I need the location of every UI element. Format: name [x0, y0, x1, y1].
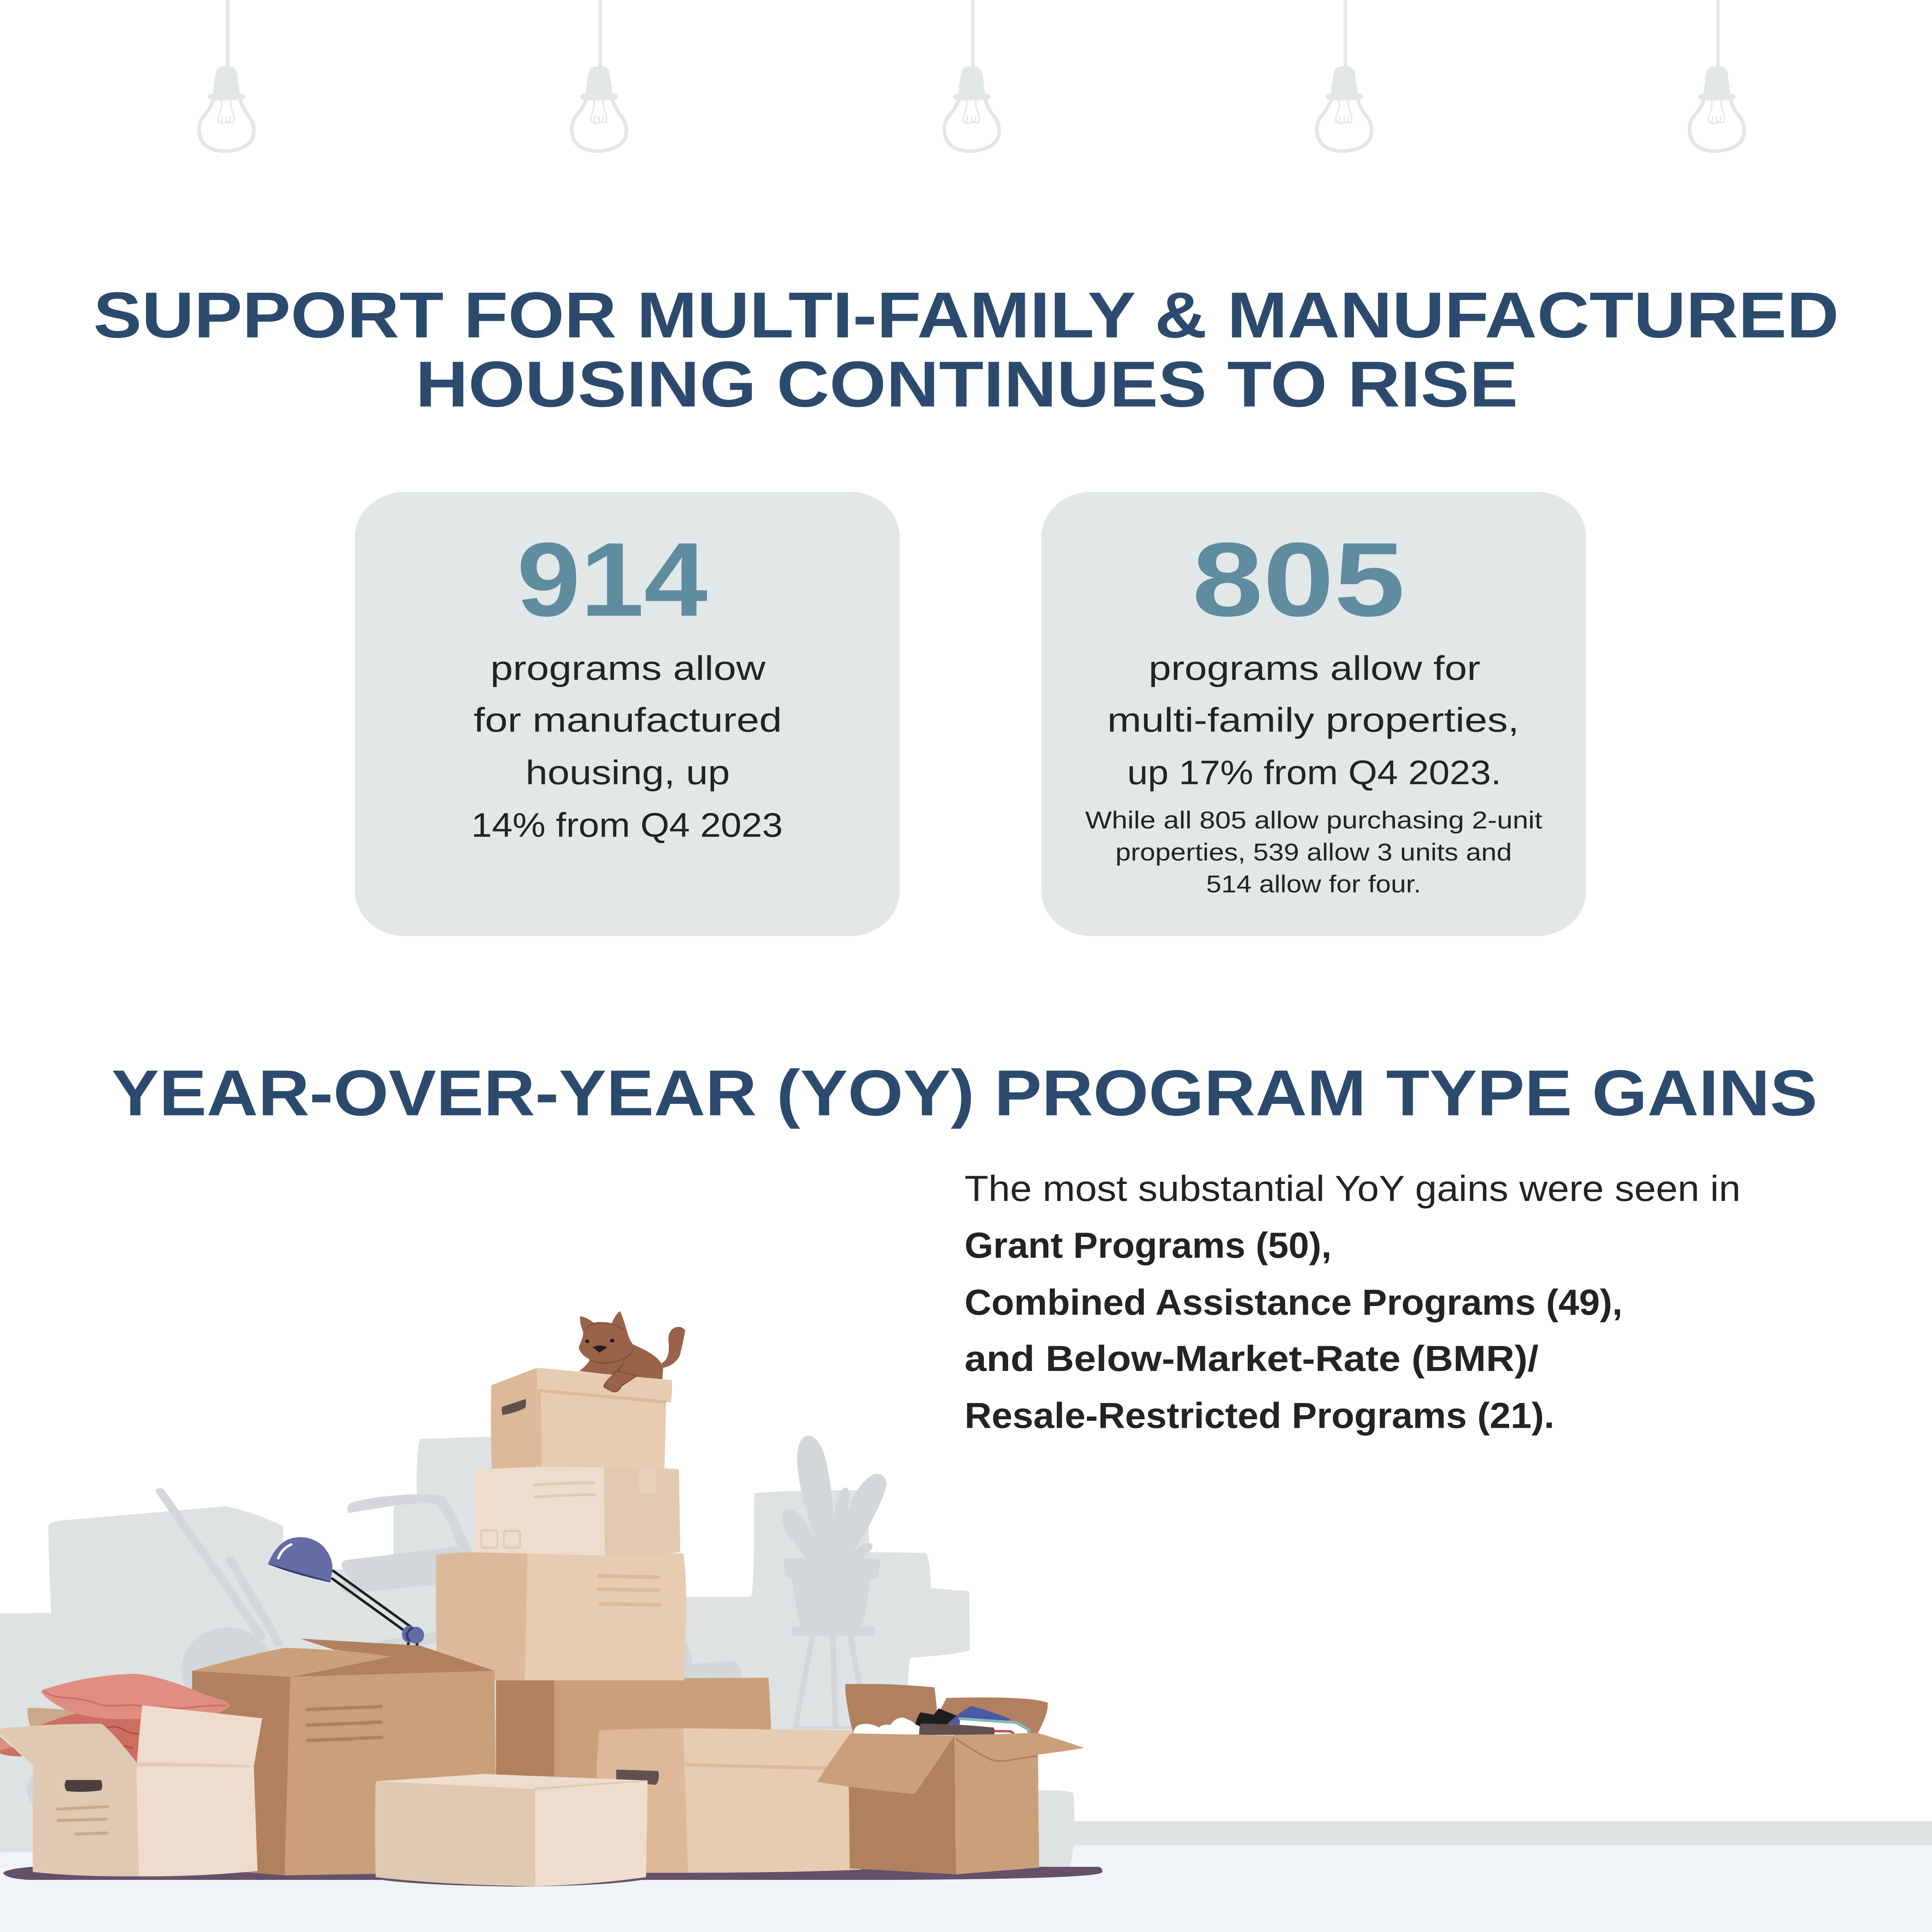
- tall stacked box: [436, 1552, 686, 1680]
- stat description: for manufactured: [474, 701, 782, 739]
- stat number 805: 805: [1192, 521, 1405, 638]
- stat description: housing, up: [526, 753, 730, 792]
- open cream box: [0, 1705, 262, 1876]
- box stack with cat: [436, 1311, 771, 1815]
- title: [94, 279, 1839, 420]
- section heading: YEAR-OVER-YEAR (YOY) PROGRAM TYPE GAINS: [112, 1057, 1818, 1129]
- stat number 914: 914: [517, 521, 708, 638]
- stat description: programs allow: [490, 649, 766, 687]
- small front box: [375, 1774, 648, 1886]
- title: HOUSING CONTINUES TO RISE: [415, 348, 1518, 420]
- icon: cat body: [579, 1311, 685, 1381]
- stat footnote: properties, 539 allow 3 units and: [1116, 839, 1512, 866]
- stat footnote: 514 allow for four.: [1206, 871, 1421, 898]
- text block: YoY gains: [964, 1168, 1741, 1435]
- wide back box: [496, 1678, 771, 1815]
- stat description: [471, 649, 783, 844]
- pillows: [0, 1674, 230, 1764]
- icon: desk lamp: [268, 1537, 424, 1650]
- stat description: 14% from Q4 2023: [471, 806, 783, 844]
- icon: hanging light bulb 2: [571, 0, 626, 151]
- text block: YoY gains: Resale-Restricted Programs (21).: [964, 1395, 1554, 1435]
- middle stacked box: [474, 1464, 680, 1556]
- icon: hanging light bulb 4: [1317, 0, 1372, 151]
- stat description: programs allow for: [1149, 649, 1480, 687]
- panel: manufactured housing stat: [355, 492, 900, 936]
- text block: YoY gains: and Below-Market-Rate (BMR)/: [964, 1338, 1539, 1379]
- stat description: up 17% from Q4 2023.: [1127, 753, 1501, 792]
- large cardboard box: [192, 1639, 497, 1875]
- icon: cat paw: [604, 1363, 637, 1392]
- panel: multi-family stat: [1041, 492, 1586, 936]
- stat footnote: [1085, 807, 1543, 898]
- open cardboard box with belongings: [817, 1684, 1084, 1874]
- floor: [0, 1845, 1932, 1932]
- top stacked box: [491, 1368, 672, 1469]
- wall band: [1057, 1821, 1932, 1845]
- stat description: [1107, 649, 1519, 792]
- title: SUPPORT FOR MULTI-FAMILY & MANUFACTURED: [94, 279, 1839, 351]
- floor shadow: [3, 1866, 1102, 1886]
- furniture silhouette background: [0, 1435, 1078, 1867]
- text block: YoY gains: Grant Programs (50),: [964, 1225, 1332, 1265]
- icon: hanging light bulb 1: [199, 0, 254, 151]
- stat footnote: While all 805 allow purchasing 2-unit: [1085, 807, 1543, 834]
- text block: YoY gains: The most substantial YoY gains were seen in: [964, 1168, 1741, 1209]
- wide light box: [596, 1728, 861, 1873]
- icon: hanging light bulb 5: [1689, 0, 1744, 151]
- text block: YoY gains: Combined Assistance Programs (49),: [964, 1282, 1622, 1322]
- icon: hanging light bulb 3: [944, 0, 999, 151]
- stat description: multi-family properties,: [1107, 701, 1519, 739]
